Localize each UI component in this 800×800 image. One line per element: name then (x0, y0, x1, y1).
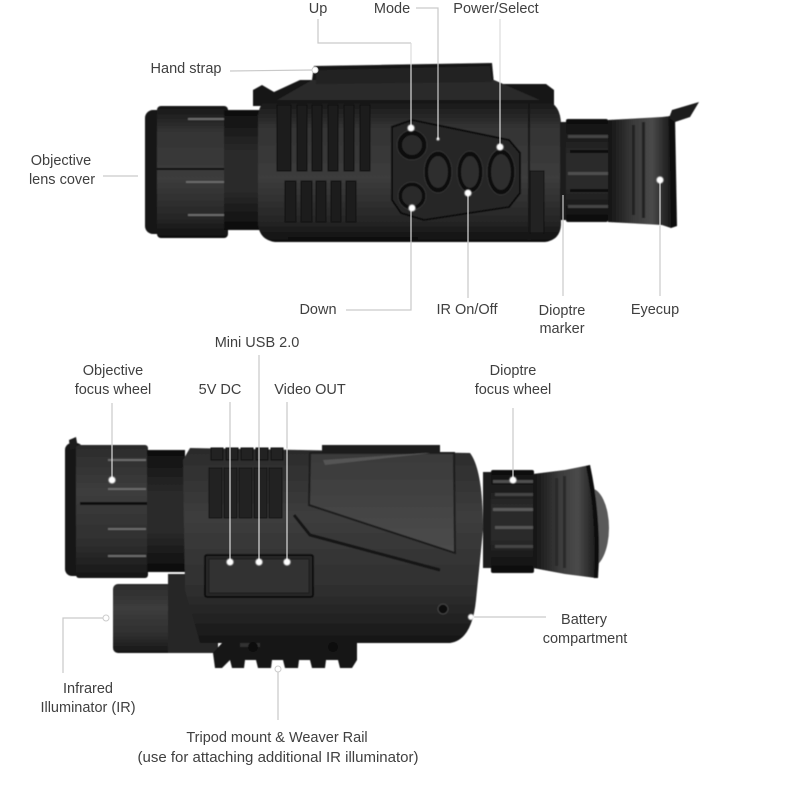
callout: Objective focus wheel: Objective (83, 363, 143, 379)
callout: Objective focus wheel (75, 363, 151, 484)
callout: Mini USB 2.0 (215, 335, 299, 566)
callout: Up: Up (309, 1, 327, 17)
callout: Dioptre focus wheel (475, 363, 551, 484)
grip ribs (277, 105, 370, 222)
callout: Video OUT: Video OUT (274, 382, 346, 398)
tripod mount and Weaver rail (213, 642, 357, 668)
callout: IR On/Off (437, 190, 498, 318)
callout: Hand strap: Hand strap (151, 61, 221, 77)
callout: Dioptre marker: Dioptre (539, 303, 585, 319)
callout: Dioptre focus wheel: focus wheel (475, 382, 551, 398)
body ribs (209, 448, 283, 518)
screw (438, 604, 448, 614)
callout: Infrared Illuminator (IR): Illuminator (IR) (40, 700, 136, 716)
callout: Mode (374, 1, 440, 140)
callout: Power/Select (453, 1, 539, 150)
callout: Battery compartment: compartment (543, 631, 627, 647)
objective focus wheel (65, 437, 185, 578)
callout: Mode: Mode (374, 1, 410, 17)
callout: Eyecup: Eyecup (631, 302, 679, 318)
callout: Battery compartment: Battery (561, 612, 608, 628)
callout: Dioptre marker: marker (539, 321, 585, 337)
button panel (392, 120, 520, 220)
callout: 5V DC (199, 382, 241, 566)
callout: Objective lens cover: Objective (31, 153, 91, 169)
callout: Objective focus wheel: focus wheel (75, 382, 151, 398)
main body (258, 100, 561, 242)
callout: Dioptre focus wheel: Dioptre (490, 363, 536, 379)
device: side view of monocular (65, 437, 609, 668)
callout: Mini USB 2.0: Mini USB 2.0 (215, 335, 299, 351)
callout: Down: Down (299, 302, 337, 318)
callout: Infrared Illuminator (IR) (40, 615, 136, 716)
callout: Eyecup (631, 176, 679, 318)
main body (183, 445, 483, 643)
callout: Tripod mount and Weaver Rail: (use for attaching additional IR illuminator) (138, 749, 418, 766)
device: top view of monocular (145, 63, 699, 242)
callout: 5V DC: 5V DC (199, 382, 241, 398)
callout: Battery compartment (468, 612, 627, 647)
callout: Tripod mount and Weaver Rail (138, 666, 418, 766)
callout: Up (309, 1, 414, 132)
callout: Objective lens cover: lens cover (29, 172, 95, 188)
callout: Power/Select: Power/Select (453, 1, 539, 17)
callout: IR On/Off: IR On/Off (437, 302, 498, 318)
dioptre focus wheel and eyecup (483, 465, 609, 578)
callout: Video OUT (274, 382, 346, 566)
callout: Tripod mount and Weaver Rail: Tripod mount & Weaver Rail (186, 730, 368, 746)
dioptre ring and eyecup (560, 102, 699, 228)
objective lens and cover (145, 106, 262, 238)
callout: Infrared Illuminator (IR): Infrared (63, 681, 113, 697)
callout: Dioptre marker (539, 195, 585, 337)
callout: Hand strap (151, 61, 318, 77)
callout: Objective lens cover (29, 153, 138, 188)
callout: Down (299, 204, 416, 318)
illuminator (113, 574, 218, 653)
hand strap and clip (253, 63, 554, 106)
port cover (205, 555, 313, 597)
